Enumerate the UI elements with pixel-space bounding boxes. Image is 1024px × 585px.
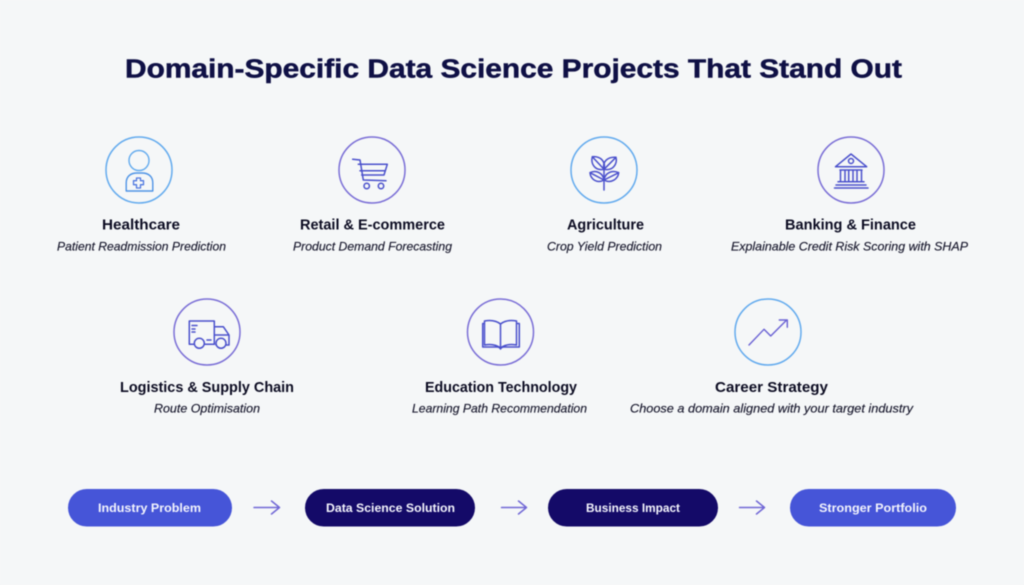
panel: healthcare (57, 137, 226, 254)
heading: education technology: Education Technology (425, 379, 578, 396)
subtitle: career strategy: Choose a domain aligned with your target industry (630, 402, 914, 416)
panel: education technology (412, 299, 587, 416)
panel: retail and e-commerce (293, 137, 452, 254)
icon: bank building (818, 137, 884, 203)
icon: patient with medical cross (106, 137, 172, 203)
arrow: step 1 to step 2 (254, 501, 280, 514)
panel: agriculture (547, 137, 662, 254)
flow step: industry problem: Industry Problem (98, 501, 201, 515)
subtitle: education technology: Learning Path Recommendation (412, 402, 587, 416)
subtitle: banking and finance: Explainable Credit Risk Scoring with SHAP (731, 240, 968, 254)
subtitle: healthcare: Patient Readmission Prediction (57, 240, 226, 254)
panel: logistics and supply chain (120, 299, 294, 416)
flow step: data science solution (305, 489, 475, 526)
icon: plant sprout (571, 137, 637, 203)
subtitle: agriculture: Crop Yield Prediction (547, 240, 662, 254)
heading: retail and e-commerce: Retail & E-commerce (300, 216, 445, 234)
flow step: business impact (548, 489, 718, 526)
arrow: step 2 to step 3 (502, 501, 526, 514)
subtitle: retail and e-commerce: Product Demand Forecasting (293, 240, 452, 254)
title: Domain-Specific Data Science Projects That Stand Out (125, 56, 903, 84)
flow step: stronger portfolio: Stronger Portfolio (819, 501, 927, 515)
arrow: step 3 to step 4 (740, 501, 764, 514)
flow step: stronger portfolio (790, 489, 956, 526)
flow step: business impact: Business Impact (586, 501, 680, 515)
panel: career strategy (630, 299, 914, 416)
heading: career strategy: Career Strategy (715, 379, 829, 396)
icon: shopping cart (339, 137, 405, 203)
heading: banking and finance: Banking & Finance (785, 216, 916, 234)
flow step: data science solution: Data Science Solution (326, 501, 455, 515)
heading: healthcare: Healthcare (102, 216, 180, 234)
flow step: industry problem (68, 489, 232, 526)
heading: agriculture: Agriculture (567, 216, 644, 234)
icon: delivery truck (174, 299, 240, 365)
subtitle: logistics and supply chain: Route Optimisation (154, 402, 260, 416)
heading: logistics and supply chain: Logistics & Supply Chain (120, 379, 294, 396)
panel: banking and finance (731, 137, 968, 254)
icon: rising trend arrow (735, 299, 801, 365)
icon: open book (468, 299, 534, 365)
